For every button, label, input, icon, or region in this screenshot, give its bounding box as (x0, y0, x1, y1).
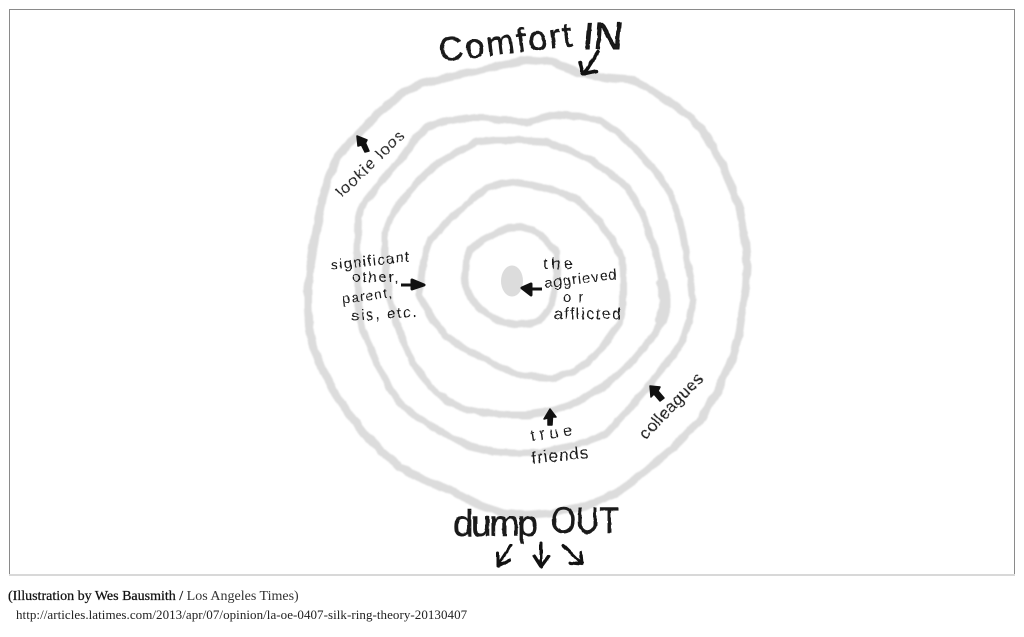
bottom edge of frame (9, 574, 1015, 576)
arrows: dump out (498, 543, 582, 567)
heading: dump OUT (453, 500, 619, 544)
label: colleagues: colleagues (635, 369, 707, 443)
caption: illustration credit: (Illustration by Wes Bausmith / Los Angeles Times) (8, 589, 299, 604)
label: significant other, parent, sis, etc.: significant (330, 249, 411, 274)
label: the aggrieved or afflicted (543, 256, 621, 323)
arrow: colleagues (650, 386, 664, 401)
arrow: true friends (544, 409, 556, 425)
ring: inner friends (420, 182, 623, 378)
heading: Comfort IN: Comfort (436, 16, 575, 70)
ring: significant other outer (385, 140, 667, 415)
arrow: the aggrieved (522, 284, 542, 295)
label: true friends: true (529, 422, 573, 445)
label: significant other, parent, sis, etc.: parent, (341, 284, 393, 307)
ring: true friends outer (357, 115, 693, 453)
label: significant other, parent, sis, etc.: other, (352, 269, 399, 286)
label: the aggrieved or afflicted: afflicted (554, 306, 621, 323)
heading: dump OUT: dump (453, 503, 538, 544)
ring: innermost (465, 227, 557, 325)
heading: Comfort IN: IN (581, 16, 625, 58)
centre blob: the aggrieved (501, 266, 523, 296)
ring: colleagues and outer (308, 60, 747, 515)
concentric rings (308, 60, 747, 515)
caption: source URL: http://articles.latimes.com/2013/apr/07/opinion/la-oe-0407-silk-ring-theory-20130407 (16, 607, 467, 622)
arrow: comfort in (580, 52, 598, 74)
label: the aggrieved or afflicted: aggrieved (543, 266, 618, 292)
label: the aggrieved or afflicted: the (543, 256, 573, 273)
label: significant other, parent, sis, etc. (330, 249, 417, 325)
arrow: lookie loos (357, 136, 369, 152)
label: the aggrieved or afflicted: or (563, 289, 583, 306)
heading: dump OUT: OUT (551, 500, 619, 541)
label: true friends (529, 422, 589, 468)
arrow: significant other (401, 280, 424, 289)
label: lookie loos: lookie loos (333, 128, 408, 201)
label: true friends: friends (530, 443, 589, 468)
ring: thick section of stroke (661, 283, 665, 320)
label: significant other, parent, sis, etc.: sis, etc. (351, 303, 417, 325)
